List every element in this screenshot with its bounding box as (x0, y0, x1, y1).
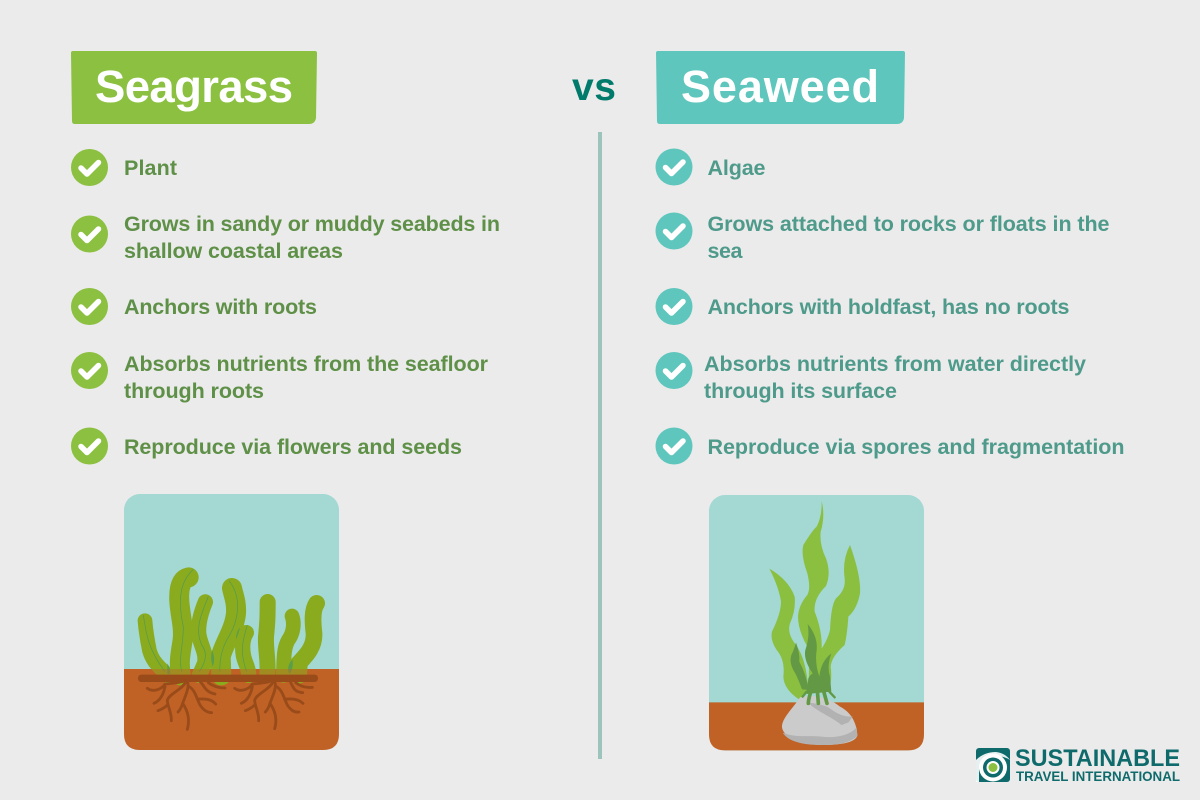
logo: Sustainable Travel International: TRAVEL INTERNATIONAL (1016, 769, 1180, 784)
item: habitat (656, 212, 1110, 263)
centre divider (598, 132, 602, 759)
item: reproduction (71, 428, 462, 464)
item: habitat: sea (708, 239, 744, 263)
item: habitat (71, 212, 500, 263)
item: habitat: shallow coastal areas (124, 239, 343, 263)
heading: Seagrass (71, 51, 317, 124)
item: algae (656, 148, 766, 186)
item: anchoring: Anchors with roots (124, 295, 317, 319)
item: algae: Algae (708, 156, 766, 180)
item: anchoring: Anchors with holdfast, has no roots (708, 295, 1070, 319)
heading: Seagrass: Seagrass (95, 61, 293, 112)
list: seaweed traits (656, 148, 1124, 464)
item: reproduction (656, 428, 1124, 464)
heading: Seaweed: Seaweed (681, 61, 879, 112)
heading: Seaweed (656, 51, 905, 124)
item: nutrients: Absorbs nutrients from the seafloor (124, 352, 489, 376)
logo wordmark: SUSTAINABLE (1015, 745, 1180, 772)
item: anchoring (71, 288, 317, 325)
item: plant (71, 149, 177, 186)
logo: Sustainable Travel International (976, 745, 1180, 784)
list: seagrass traits (71, 149, 500, 464)
item: nutrients: Absorbs nutrients from water directly (704, 352, 1086, 376)
item: nutrients (656, 352, 1086, 403)
label: vs: vs (572, 66, 616, 109)
item: anchoring (656, 288, 1070, 325)
item: plant: Plant (124, 156, 177, 180)
item: nutrients (71, 352, 489, 403)
item: reproduction: Reproduce via flowers and seeds (124, 435, 462, 459)
illustration: seagrass with roots (124, 494, 339, 750)
item: nutrients: through its surface (704, 379, 897, 403)
item: reproduction: Reproduce via spores and fragmentation (708, 435, 1124, 459)
illustration: seaweed on a rock (709, 495, 924, 750)
item: habitat: Grows in sandy or muddy seabeds in (124, 212, 500, 236)
item: nutrients: through roots (124, 379, 264, 403)
logo icon (976, 748, 1010, 782)
item: habitat: Grows attached to rocks or floats in the (708, 212, 1110, 236)
